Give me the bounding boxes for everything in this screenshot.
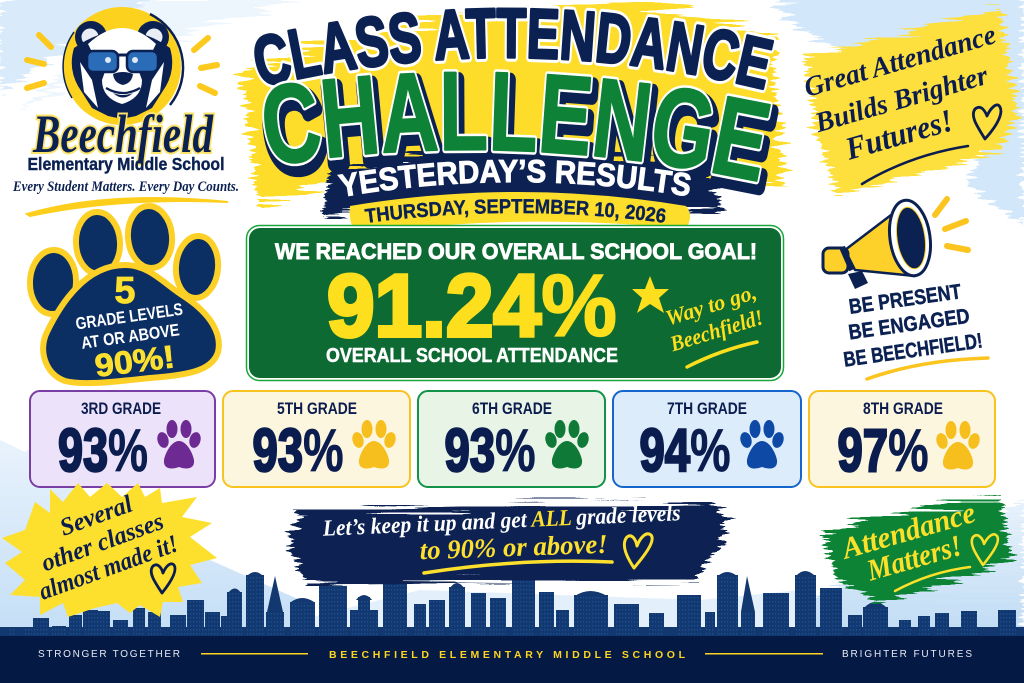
goal heading: WE REACHED OUR OVERALL SCHOOL GOAL! [275,239,757,264]
way to go message: Way to go, [662,279,760,331]
starburst: several other classes [2,481,217,617]
starburst: several other classes: other classes [38,508,167,577]
brush: attendance matters [822,496,1012,604]
icon: heart [972,534,998,565]
banner: keep it up: Let’s keep it up and get ALL grade levels [321,500,681,541]
icon: purple paw [156,420,202,469]
icon: sun rays [27,35,217,93]
tagline: Every Student Matters. Every Day Counts. [12,179,239,195]
footer center: BEECHFIELD ELEMENTARY MIDDLE SCHOOL [329,649,689,661]
brush: title yellow [242,0,785,204]
grade card: 5th: 5TH GRADE [277,399,357,418]
grade card: 6th: 93% [444,417,536,484]
footer band [0,636,1024,683]
grade card: 7th: 94% [640,417,730,484]
footer right: BRIGHTER FUTURES [842,649,975,660]
grade card: 8th: 8TH GRADE [863,399,943,418]
subtitle: Elementary Middle School [28,154,224,174]
brush: attendance matters: Attendance [836,496,979,566]
logo: school bear mascot and name [12,7,239,216]
grade card: 6th: 6TH GRADE [472,399,552,418]
icon: gold paw [351,420,397,469]
brush: great attendance message: Builds Brighter [811,60,992,139]
skyline [0,571,1024,636]
icon: blue paw [739,420,785,469]
slogan: be present [842,280,988,379]
grade card: 5th: 93% [252,417,344,484]
slogan: be present: BE BEECHFIELD! [842,329,984,372]
brush: great attendance message [801,8,1019,195]
icon: heart [151,564,175,593]
icon: star [632,276,669,313]
way to go message: Beechfield! [666,304,766,357]
grade card: 3rd [30,391,215,487]
paw callout: grade levels at or above 90: 90%! [93,338,177,384]
heading: challenge: CHALLENGE [262,72,779,196]
starburst: several other classes: Several [56,491,136,542]
icon: heart [973,105,1001,139]
icon: heart [624,534,652,568]
title block [233,2,794,225]
paw callout: grade levels at or above 90: 5 [114,270,136,312]
brush: attendance matters: Matters! [862,529,966,588]
grade card: 7th: 7TH GRADE [667,399,747,418]
date ribbon: THURSDAY, SEPTEMBER 10, 2026 [364,199,666,223]
paw callout: grade levels at or above 90: GRADE LEVELS [74,300,184,333]
school name: Beechfield [32,104,214,164]
grade card: 5th [223,391,410,487]
icon: gold paw [935,421,981,470]
banner: keep it up [290,500,730,584]
grade card: 3rd: 3RD GRADE [81,399,161,418]
grade card: 8th [809,391,995,487]
banner: keep it up: to 90% or above! [419,529,608,565]
attendance caption: OVERALL SCHOOL ATTENDANCE [326,345,618,367]
paw callout: grade levels at or above 90: AT OR ABOVE [80,320,181,353]
slogan: be present: BE ENGAGED [847,305,971,344]
grade card: 6th [418,391,605,487]
footer left: STRONGER TOGETHER [38,649,183,660]
big attendance number: 91.24% [327,256,617,355]
grade card: 7th [613,391,801,487]
starburst: several other classes: almost made it! [35,530,182,606]
way to go message [659,279,767,357]
heading: challenge: CHALLENGE [262,69,773,184]
heading: challenge: CHALLENGE [264,72,771,182]
icon: sunglasses [87,51,158,72]
brush: great attendance message: Futures! [840,102,957,167]
icon: megaphone [823,198,968,289]
panel: overall attendance result [246,226,784,380]
paw callout: grade levels at or above 90 [28,204,221,384]
slogan: be present: BE PRESENT [848,280,963,319]
grade card: 8th: 97% [838,417,928,484]
heading: yesterday's results: YESTERDAY’S RESULTS [337,159,691,196]
icon: bear mascot [63,7,183,125]
brush: great attendance message: Great Attendance [801,19,1000,104]
icon: green paw [544,420,590,469]
brush: navy results banner [322,150,722,216]
grade card: 3rd: 93% [58,417,148,484]
